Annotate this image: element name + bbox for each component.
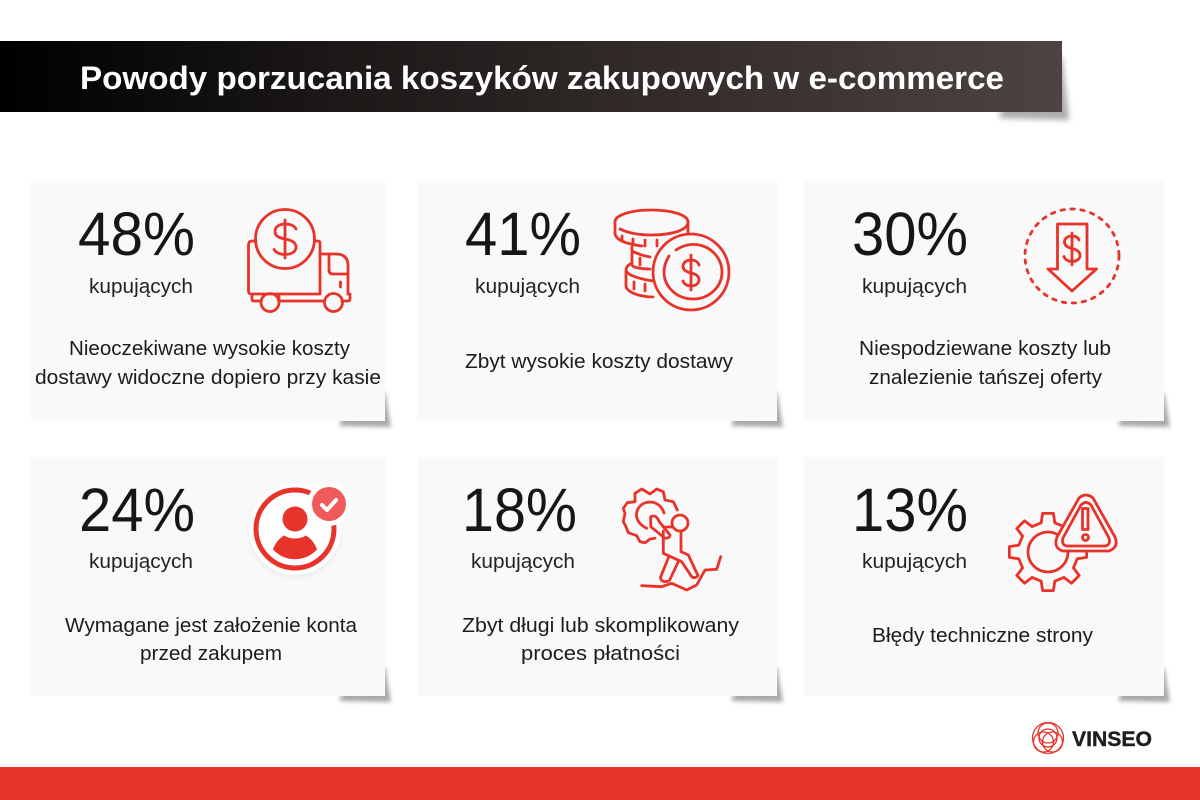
description: Wymagane jest założenie konta [65, 615, 358, 637]
icon: person pushing gear uphill [623, 489, 721, 590]
description: Zbyt długi lub skomplikowany [462, 615, 739, 637]
label kupujących: kupujących [862, 276, 967, 298]
title banner [0, 41, 1069, 120]
stat 48%: 48% [78, 200, 195, 268]
logo: VINSEO: VINSEO [1072, 728, 1152, 751]
panel: 48% [31, 181, 391, 427]
icon: delivery truck with dollar [248, 210, 350, 312]
description: znalezienie tańszej oferty [869, 367, 1102, 389]
icon: stacked coins [615, 210, 729, 310]
icon: user account with check badge [249, 482, 351, 578]
icon: gear with warning triangle [1009, 495, 1116, 591]
description: Niespodziewane koszty lub [859, 338, 1111, 360]
panel: 24% [31, 457, 391, 702]
label kupujących: kupujących [475, 276, 580, 298]
description: Zbyt wysokie koszty dostawy [465, 351, 733, 373]
stat 13%: 13% [852, 476, 968, 544]
panel: 41% [417, 181, 783, 427]
panel: 30% [804, 181, 1170, 427]
stat 30%: 30% [852, 200, 968, 268]
footer bar [0, 767, 1200, 800]
label kupujących: kupujących [89, 551, 193, 573]
title: Powody porzucania koszyków zakupowych w e-commerce [80, 60, 1004, 96]
icon: price drop arrow [1025, 209, 1119, 303]
logo mark [1032, 722, 1064, 754]
stat 24%: 24% [79, 476, 195, 544]
panel: 18% [417, 457, 783, 702]
description: Błędy techniczne strony [872, 625, 1093, 647]
panel: 13% [804, 457, 1170, 702]
description: dostawy widoczne dopiero przy kasie [35, 367, 381, 389]
description: Nieoczekiwane wysokie koszty [69, 338, 350, 360]
label kupujących: kupujących [89, 276, 193, 298]
description: proces płatności [521, 643, 680, 665]
stat 41%: 41% [465, 200, 581, 268]
stat 18%: 18% [462, 476, 577, 544]
label kupujących: kupujących [862, 551, 967, 573]
logo: VINSEO [1032, 722, 1152, 754]
description: przed zakupem [140, 643, 282, 665]
label kupujących: kupujących [471, 551, 575, 573]
